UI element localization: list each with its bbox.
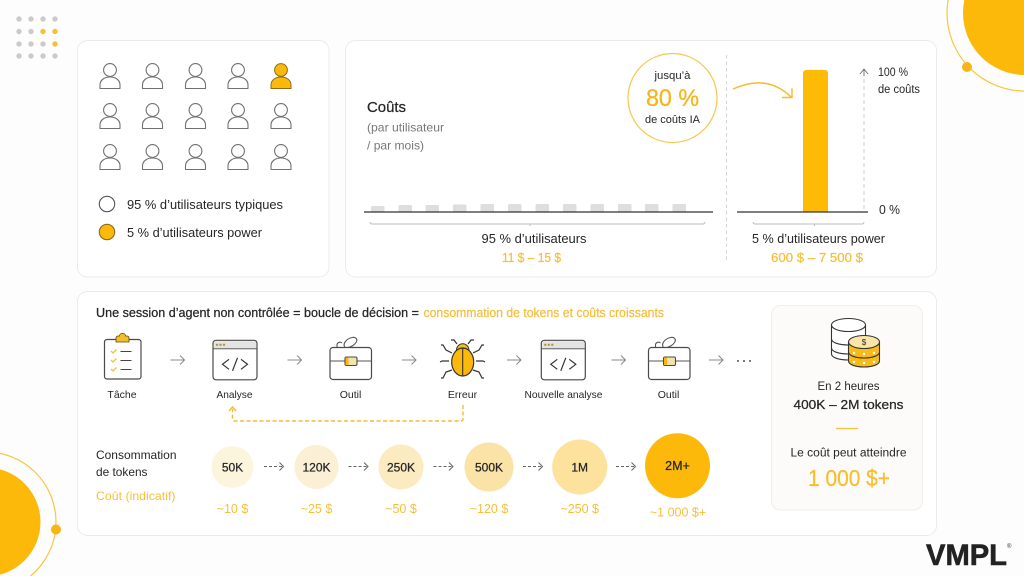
token step: 2M+: ~1 000 $+ xyxy=(650,506,706,520)
axis labels: de coûts xyxy=(878,84,920,96)
icon: database and coins: $ xyxy=(862,338,867,347)
flow step: new analysis xyxy=(524,340,603,401)
axis labels xyxy=(878,67,920,217)
flow step: tool again: Outil xyxy=(658,389,679,401)
feedback loop arrow xyxy=(229,405,463,421)
token step: 1M: ~250 $ xyxy=(560,502,599,516)
token step: 50K: 50K xyxy=(222,460,243,474)
text: tokens in 2 hours: En 2 heures xyxy=(818,381,880,393)
text: cost can reach xyxy=(790,448,906,491)
token step: 1M xyxy=(552,440,607,516)
axis labels: 100 % xyxy=(878,67,908,79)
token step: 2M+: 2M+ xyxy=(665,459,690,473)
panel: costs chart xyxy=(346,40,936,277)
heading: costs: Coûts xyxy=(367,100,406,116)
text: cost can reach: Le coût peut atteindre xyxy=(790,448,906,460)
logo: VMPL: ® xyxy=(1007,543,1012,550)
callout: up to 80% of AI costs: de coûts IA xyxy=(645,114,701,126)
arrow xyxy=(170,356,184,364)
heading: agent session xyxy=(96,306,664,320)
arrow xyxy=(288,356,302,364)
token step: 120K: 120K xyxy=(302,460,331,474)
arrow: to power users bar xyxy=(733,83,792,98)
bar chart: 5% of users xyxy=(737,69,885,265)
arrow xyxy=(434,462,453,470)
arrow xyxy=(612,356,626,364)
token step: 50K xyxy=(212,446,254,516)
heading: costs: / par mois) xyxy=(367,138,424,152)
flow step: analysis xyxy=(213,340,257,401)
token step: 120K xyxy=(294,445,338,516)
arrow xyxy=(402,356,416,364)
decorative dot grid xyxy=(16,16,58,59)
panel: agent session xyxy=(78,292,936,536)
decorative top-right sun xyxy=(947,0,1024,91)
flow step: error: Erreur xyxy=(448,389,478,401)
text: cost can reach: 1 000 $+ xyxy=(808,465,890,491)
token consumption labels xyxy=(96,448,176,503)
heading: agent session: consommation de tokens et coûts croissants xyxy=(424,306,664,320)
token consumption labels: de tokens xyxy=(96,465,148,479)
token step: 250K: ~50 $ xyxy=(385,502,417,516)
callout: up to 80% of AI costs: 80 % xyxy=(646,85,699,112)
bar chart: 95% of users: 11 $ – 15 $ xyxy=(502,250,562,265)
token step: 1M: 1M xyxy=(571,460,588,474)
token step: 250K: 250K xyxy=(387,460,415,474)
token step: 500K xyxy=(464,442,514,516)
heading: costs: (par utilisateur xyxy=(367,120,444,134)
legend: typical users: 95 % d’utilisateurs typiques xyxy=(127,197,283,212)
arrow xyxy=(348,462,368,470)
flow step: task: Tâche xyxy=(107,389,137,401)
flow step: tool xyxy=(330,337,372,401)
flow step: tool: Outil xyxy=(340,389,361,401)
logo: VMPL: VMPL xyxy=(926,539,1007,572)
token step: 500K: 500K xyxy=(475,460,503,474)
callout: up to 80% of AI costs xyxy=(628,54,717,142)
flow step: error xyxy=(440,340,485,401)
heading: costs xyxy=(367,100,444,152)
icon: database and coins xyxy=(832,318,880,367)
heading: agent session: Une session d’agent non contrôlée = boucle de décision = xyxy=(96,306,419,320)
summary card xyxy=(772,306,922,510)
flow step: tool again xyxy=(648,337,690,401)
arrow xyxy=(709,356,723,364)
decorative bottom-left sun xyxy=(0,452,61,576)
flow step: analysis: Analyse xyxy=(216,389,253,401)
bar chart: 95% of users: 95 % d’utilisateurs xyxy=(482,232,586,246)
panel: user share xyxy=(78,40,329,277)
arrow xyxy=(264,462,284,470)
token consumption labels: Coût (indicatif) xyxy=(96,489,176,503)
callout: up to 80% of AI costs: jusqu’à xyxy=(653,70,691,82)
continuation dots xyxy=(737,360,751,362)
arrow xyxy=(616,462,636,470)
arrow xyxy=(507,356,521,364)
icon grid: 15 users xyxy=(100,64,291,170)
token consumption labels: Consommation xyxy=(96,448,176,462)
token step: 50K: ~10 $ xyxy=(217,502,248,516)
flow step: task xyxy=(104,333,141,401)
flow step: new analysis: Nouvelle analyse xyxy=(524,389,603,401)
arrow xyxy=(523,462,542,470)
axis labels: 0 % xyxy=(879,203,900,217)
legend: power users: 5 % d’utilisateurs power xyxy=(127,225,263,240)
text: tokens in 2 hours: 400K – 2M tokens xyxy=(794,397,904,412)
token step: 500K: ~120 $ xyxy=(470,502,508,516)
bar chart: 95% of users xyxy=(364,204,713,265)
token step: 120K: ~25 $ xyxy=(301,502,332,516)
text: tokens in 2 hours xyxy=(794,381,904,412)
bar chart: 5% of users: 5 % d’utilisateurs power xyxy=(752,232,885,246)
bar chart: 5% of users: 600 $ – 7 500 $ xyxy=(771,250,864,265)
token step: 250K xyxy=(378,444,424,516)
token step: 2M+ xyxy=(645,433,710,520)
